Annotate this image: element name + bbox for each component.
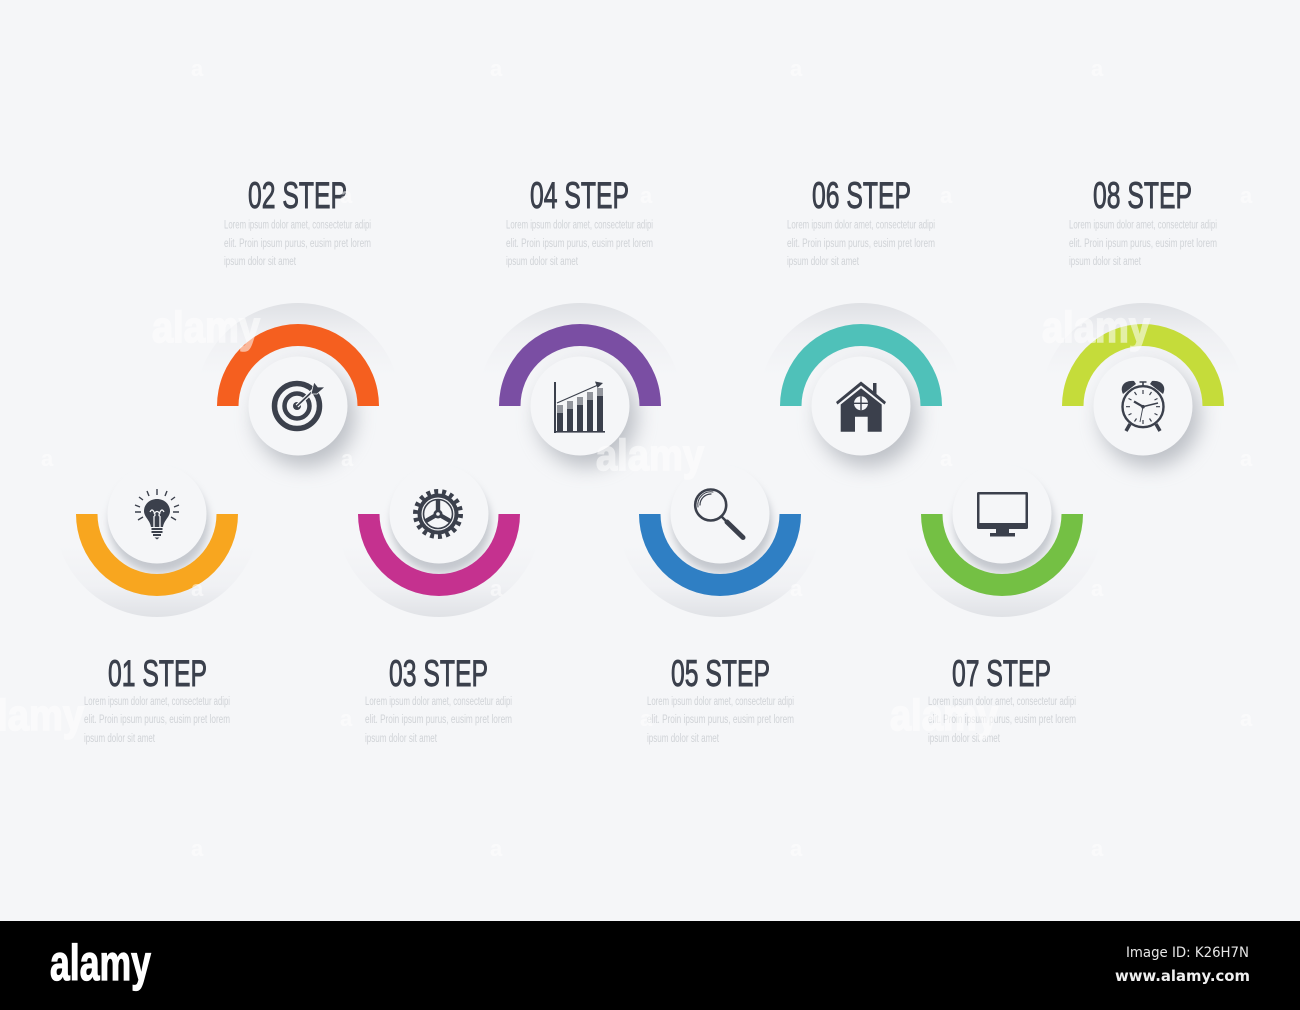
circle shadow (537, 367, 637, 467)
watermarks: alamy (596, 431, 704, 480)
icon: bar chart (554, 382, 605, 433)
watermarks: a (1091, 56, 1104, 81)
label: 08 step: elit. Proin ipsum purus, eusim pret lorem (1069, 238, 1217, 250)
label: 04 step: elit. Proin ipsum purus, eusim pret lorem (506, 238, 653, 250)
step 07 (899, 464, 1105, 617)
watermarks: a (340, 183, 353, 208)
watermarks: alamy (890, 691, 998, 740)
circle shadow (672, 473, 772, 573)
watermarks: a (1240, 183, 1253, 208)
circle shadow (391, 473, 491, 573)
lime arc (1062, 324, 1224, 406)
watermarks: a (790, 576, 803, 601)
recessed half disc (617, 514, 823, 617)
label: 07 step: ipsum dolor sit amet (928, 733, 1001, 745)
label: 03 step (365, 653, 512, 745)
label: 06 step: 06 STEP (812, 175, 911, 216)
watermarks: a (41, 446, 54, 471)
white circle (248, 356, 348, 456)
watermarks: a (1240, 446, 1253, 471)
label: 05 step: elit. Proin ipsum purus, eusim pret lorem (647, 714, 794, 726)
watermarks (0, 56, 1253, 861)
label: 06 step: elit. Proin ipsum purus, eusim pret lorem (787, 238, 935, 250)
icon: target (274, 382, 325, 428)
watermarks: a (640, 706, 653, 731)
label: 05 step: ipsum dolor sit amet (647, 733, 720, 745)
watermarks: a (191, 56, 204, 81)
watermarks: a (940, 183, 953, 208)
watermarks: a (1240, 706, 1253, 731)
watermarks: a (191, 576, 204, 601)
icon: light bulb (135, 489, 179, 540)
label: 05 step: 05 STEP (671, 653, 770, 694)
label: 07 step: elit. Proin ipsum purus, eusim pret lorem (928, 714, 1076, 726)
label: 02 step: elit. Proin ipsum purus, eusim pret lorem (224, 238, 371, 250)
watermarks: a (1091, 576, 1104, 601)
label: 02 step: Lorem ipsum dolor amet, consectetur adipi (224, 220, 371, 232)
watermarks: a (191, 836, 204, 861)
blue arc (639, 514, 801, 596)
step 01 (54, 464, 260, 617)
label: 08 step: Lorem ipsum dolor amet, consectetur adipi (1069, 220, 1217, 232)
watermarks: a (790, 56, 803, 81)
label: 03 step: 03 STEP (389, 653, 488, 694)
recessed half disc (477, 303, 683, 406)
label: 04 step (506, 175, 653, 268)
watermarks: a (340, 706, 353, 731)
website: www.alamy.com (1115, 967, 1250, 985)
icon: magnifier (695, 490, 743, 538)
label: 08 step: ipsum dolor sit amet (1069, 256, 1142, 268)
white circle (812, 356, 910, 456)
icon: monitor (977, 492, 1028, 536)
label: 02 step: 02 STEP (248, 175, 347, 216)
red-orange arc (217, 324, 379, 406)
white circle (952, 464, 1052, 564)
watermarks: alamy (1042, 303, 1150, 352)
white circle (108, 464, 206, 564)
white circle (670, 464, 770, 564)
label: 03 step: ipsum dolor sit amet (365, 733, 438, 745)
recessed half disc (758, 303, 964, 406)
white circle (530, 356, 630, 456)
circle shadow (1100, 367, 1200, 467)
label: 02 step (224, 175, 371, 268)
orange arc (76, 514, 238, 596)
label: 04 step: 04 STEP (530, 175, 629, 216)
watermarks: alamy (152, 303, 260, 352)
label: 04 step: ipsum dolor sit amet (506, 256, 579, 268)
label: 01 step: Lorem ipsum dolor amet, consectetur adipi (84, 696, 230, 708)
footer logo: alamy (50, 935, 151, 991)
label: 01 step: ipsum dolor sit amet (84, 733, 156, 745)
watermarks: a (341, 446, 354, 471)
circle shadow (109, 473, 209, 573)
label: 01 step (84, 653, 230, 745)
white circle (390, 464, 488, 564)
label: 02 step: ipsum dolor sit amet (224, 256, 297, 268)
image id: Image ID: K26H7N (1126, 945, 1249, 961)
label: 01 step: elit. Proin ipsum purus, eusim pret lorem (84, 714, 230, 726)
step 04 (477, 303, 683, 467)
watermarks: a (490, 576, 503, 601)
white circle (1094, 356, 1192, 456)
label: 05 step: Lorem ipsum dolor amet, consectetur adipi (647, 696, 794, 708)
step 06 (758, 303, 964, 467)
circle shadow (255, 367, 355, 467)
recessed half disc (54, 514, 260, 617)
teal arc (780, 324, 942, 406)
watermarks: a (790, 836, 803, 861)
recessed half disc (336, 514, 542, 617)
label: 06 step: ipsum dolor sit amet (787, 256, 860, 268)
footer bar (0, 921, 1300, 1010)
label: 08 step (1069, 175, 1217, 268)
magenta arc (358, 514, 520, 596)
label: 01 step: 01 STEP (108, 653, 207, 694)
watermarks: a (490, 56, 503, 81)
label: 05 step (647, 653, 794, 745)
watermarks: a (640, 183, 653, 208)
label: 07 step (928, 653, 1076, 745)
recessed half disc (899, 514, 1105, 617)
label: 03 step: Lorem ipsum dolor amet, consectetur adipi (365, 696, 512, 708)
label: 08 step: 08 STEP (1093, 175, 1192, 216)
icon: house (836, 382, 886, 432)
label: 06 step (787, 175, 935, 268)
icon: gear (416, 492, 460, 536)
watermarks: a (490, 836, 503, 861)
recessed half disc (1040, 303, 1246, 406)
label: 04 step: Lorem ipsum dolor amet, consectetur adipi (506, 220, 653, 232)
green arc (921, 514, 1083, 596)
step 05 (617, 464, 823, 617)
label: 03 step: elit. Proin ipsum purus, eusim pret lorem (365, 714, 512, 726)
step 03 (336, 464, 542, 617)
icon: alarm clock (1122, 381, 1164, 431)
watermarks: a (1091, 836, 1104, 861)
step 02 (195, 303, 401, 467)
label: 06 step: Lorem ipsum dolor amet, consectetur adipi (787, 220, 935, 232)
step 08 (1040, 303, 1246, 467)
recessed half disc (195, 303, 401, 406)
purple arc (499, 324, 661, 406)
circle shadow (818, 367, 918, 467)
circle shadow (954, 473, 1054, 573)
watermarks: a (940, 446, 953, 471)
label: 07 step: Lorem ipsum dolor amet, consectetur adipi (928, 696, 1076, 708)
label: 07 step: 07 STEP (952, 653, 1051, 694)
